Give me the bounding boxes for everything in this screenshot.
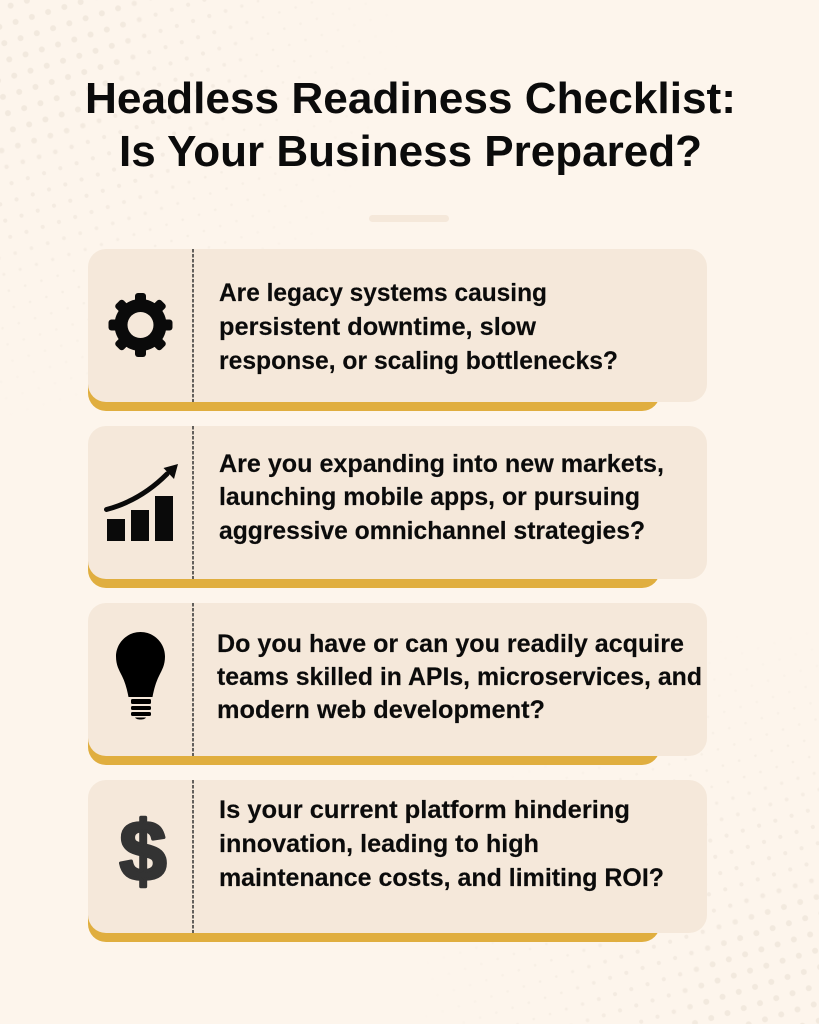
question text: launching mobile apps, or pursuing	[219, 483, 640, 511]
panel: team skills	[88, 603, 707, 765]
card accent	[88, 871, 660, 942]
card accent	[88, 694, 660, 765]
panel: platform cost	[88, 780, 707, 942]
question text: innovation, leading to high	[219, 830, 539, 858]
card body	[88, 249, 707, 402]
question text	[219, 450, 664, 545]
card accent	[88, 517, 660, 588]
card body	[88, 426, 707, 579]
dashed separator	[192, 780, 194, 933]
question text: modern web development?	[217, 696, 545, 724]
icon: light bulb	[116, 632, 165, 720]
question text: Are legacy systems causing	[219, 279, 547, 307]
title	[85, 74, 736, 176]
question text: Is your current platform hindering	[219, 796, 630, 824]
question text: persistent downtime, slow	[219, 313, 537, 341]
title: Headless Readiness Checklist:	[85, 74, 736, 123]
dashed separator	[192, 426, 194, 579]
heading divider pill	[369, 215, 449, 222]
card body	[88, 603, 707, 756]
question text: Are you expanding into new markets,	[219, 450, 664, 478]
card body	[88, 780, 707, 933]
question text: aggressive omnichannel strategies?	[219, 517, 645, 545]
icon: dollar sign: $	[120, 804, 166, 898]
question text	[217, 630, 702, 724]
panel: legacy systems	[88, 249, 707, 411]
question text: response, or scaling bottlenecks?	[219, 347, 618, 375]
question text	[219, 796, 664, 892]
title: Is Your Business Prepared?	[119, 127, 702, 176]
question text	[219, 279, 618, 375]
icon: growth chart	[106, 464, 178, 541]
dashed separator	[192, 249, 194, 402]
panel: market expansion	[88, 426, 707, 588]
question text: maintenance costs, and limiting ROI?	[219, 864, 664, 892]
dashed separator	[192, 603, 194, 756]
icon: gear	[108, 293, 172, 357]
question text: teams skilled in APIs, microservices, and	[217, 663, 702, 691]
question text: Do you have or can you readily acquire	[217, 630, 684, 658]
card accent	[88, 340, 660, 411]
